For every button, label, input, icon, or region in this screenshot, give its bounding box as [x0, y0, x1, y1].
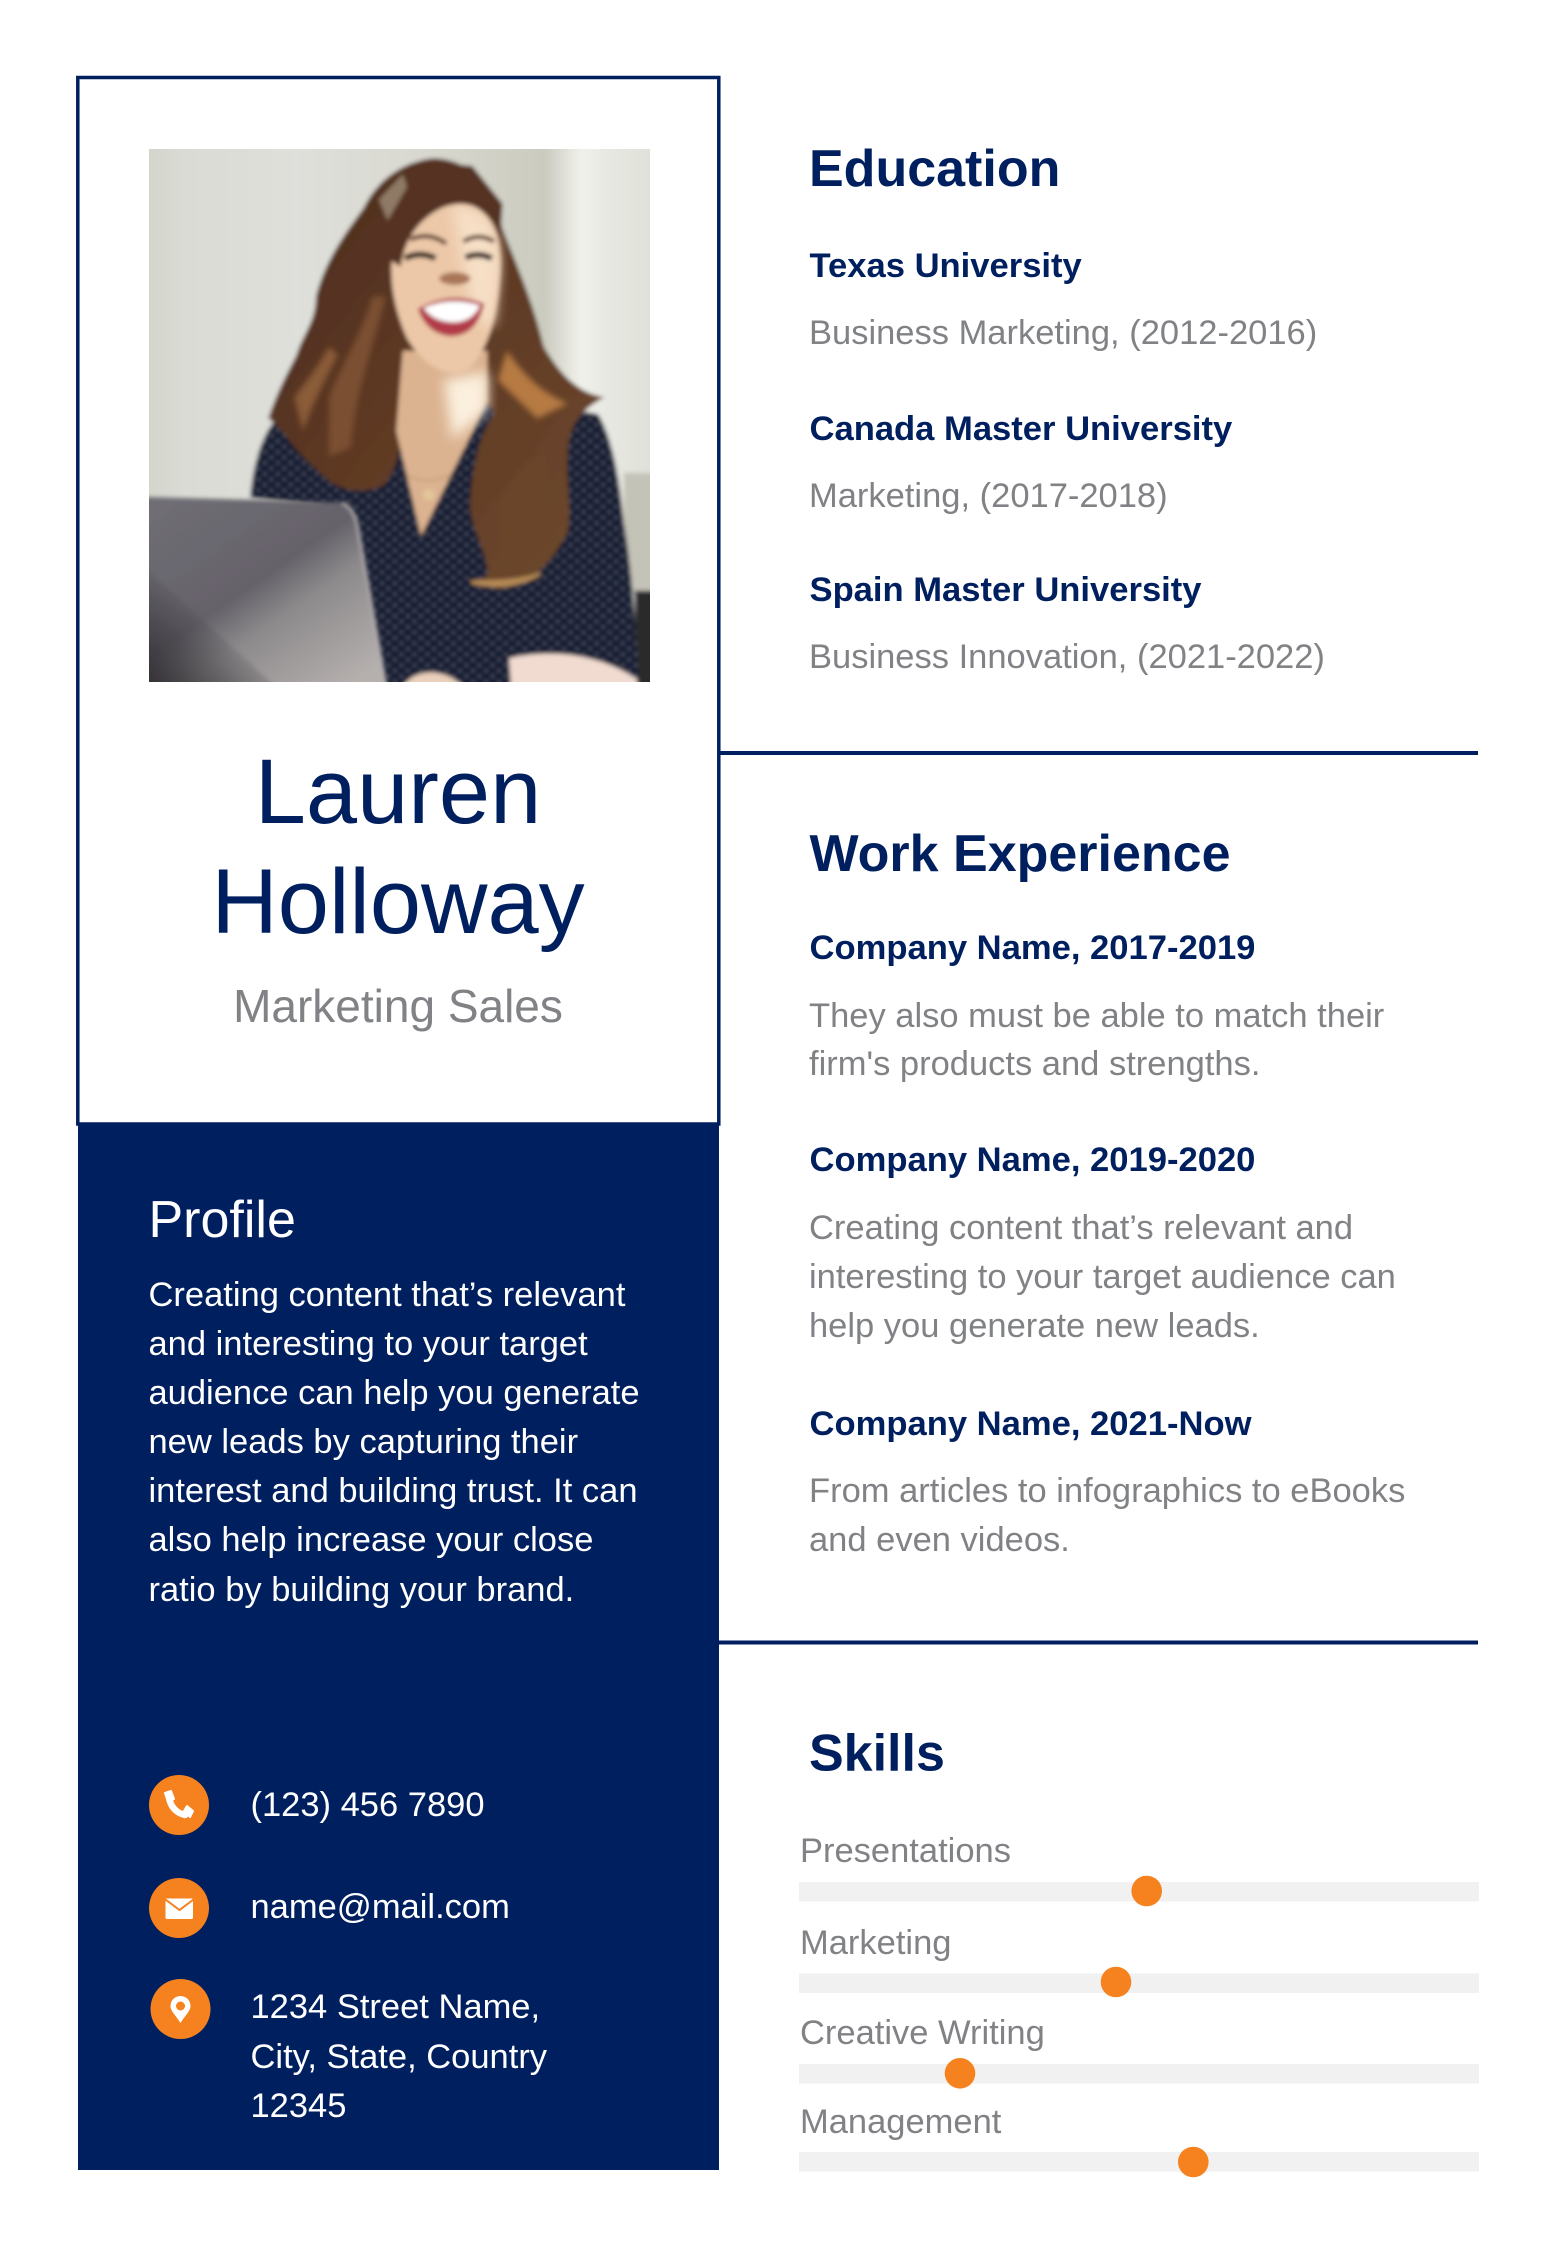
job 2021-Now: From articles to infographics to eBooks — [809, 1472, 1405, 1510]
skill: Creative Writing: Creative Writing — [800, 2014, 1045, 2052]
name heading: Lauren — [255, 741, 541, 843]
job 2021-Now: Company Name, 2021-Now — [810, 1405, 1252, 1443]
icon: location pin — [150, 1979, 210, 2039]
job 2017-2019: Company Name, 2017-2019 — [810, 929, 1255, 967]
icon: mail — [149, 1878, 209, 1938]
profile text: ratio by building your brand. — [148, 1571, 574, 1609]
necklace — [407, 475, 450, 480]
entry: Spain Master University: Spain Master University — [810, 571, 1202, 609]
skills heading: Skills — [809, 1724, 945, 1782]
skill: Marketing: Marketing — [800, 1924, 951, 1962]
profile text: interest and building trust. It can — [148, 1472, 638, 1510]
skill: Presentations — [799, 1832, 1479, 1906]
entry: Spain Master University: Business Innovation, (2021-2022) — [809, 638, 1325, 676]
panel: profile and contact — [78, 1124, 719, 2170]
job 2019-2020: help you generate new leads. — [809, 1307, 1260, 1345]
hands — [509, 654, 637, 687]
job 2019-2020: Company Name, 2019-2020 — [810, 1141, 1255, 1179]
name heading — [211, 741, 585, 953]
job 2019-2020: interesting to your target audience can — [809, 1258, 1396, 1296]
entry: Spain Master University — [809, 571, 1325, 676]
education heading: Education — [809, 140, 1060, 198]
profile text: also help increase your close — [148, 1521, 593, 1559]
entry: Canada Master University — [809, 410, 1233, 515]
skill: Management: Management — [800, 2103, 1002, 2141]
address — [250, 1988, 548, 2125]
job 2019-2020: Creating content that’s relevant and — [809, 1209, 1353, 1247]
address: 12345 — [250, 2087, 346, 2125]
profile text — [148, 1276, 640, 1609]
job 2017-2019: They also must be able to match their — [809, 997, 1384, 1035]
entry: Texas University: Business Marketing, (2012-2016) — [809, 314, 1317, 352]
photo: laughing woman at laptop — [149, 149, 650, 682]
icon: phone — [149, 1775, 209, 1835]
skill: Presentations: Presentations — [800, 1832, 1011, 1870]
neck and chest — [396, 351, 487, 536]
profile text: Creating content that’s relevant — [148, 1276, 626, 1314]
job 2019-2020 — [809, 1141, 1396, 1345]
section: skills — [799, 1724, 1479, 2177]
nose — [439, 272, 470, 285]
panel: profile card outline — [78, 78, 719, 1124]
face — [391, 201, 501, 373]
hair back — [268, 158, 604, 589]
address: 1234 Street Name, — [250, 1988, 540, 2026]
entry: Canada Master University: Marketing, (2017-2018) — [809, 477, 1168, 515]
phone number: (123) 456 7890 — [250, 1786, 485, 1824]
laptop — [142, 497, 386, 687]
job 2017-2019 — [809, 929, 1384, 1083]
profile heading: Profile — [148, 1191, 296, 1249]
skill: Marketing — [799, 1924, 1479, 1997]
brows and eyes — [411, 236, 494, 244]
entry: Canada Master University: Canada Master University — [810, 410, 1233, 448]
skill: Creative Writing — [799, 2014, 1479, 2089]
fringe — [383, 162, 503, 267]
name heading: Holloway — [211, 851, 585, 953]
panel background — [78, 1124, 719, 2170]
job 2021-Now: and even videos. — [809, 1521, 1070, 1559]
profile text: new leads by capturing their — [148, 1423, 578, 1461]
work experience heading: Work Experience — [810, 825, 1231, 883]
entry: Texas University: Texas University — [810, 247, 1083, 285]
job 2021-Now — [809, 1405, 1405, 1559]
profile text: audience can help you generate — [148, 1374, 640, 1412]
section: work experience — [809, 825, 1405, 1559]
profile text: and interesting to your target — [148, 1325, 588, 1363]
blouse — [250, 397, 639, 687]
section: education — [809, 140, 1325, 676]
address: City, State, Country — [250, 2038, 548, 2076]
entry: Texas University — [809, 247, 1317, 352]
job title: Marketing Sales — [233, 980, 563, 1032]
mouth — [418, 298, 484, 336]
job 2017-2019: firm's products and strengths. — [809, 1045, 1260, 1083]
skill: Management — [799, 2103, 1479, 2177]
email: name@mail.com — [250, 1888, 510, 1926]
